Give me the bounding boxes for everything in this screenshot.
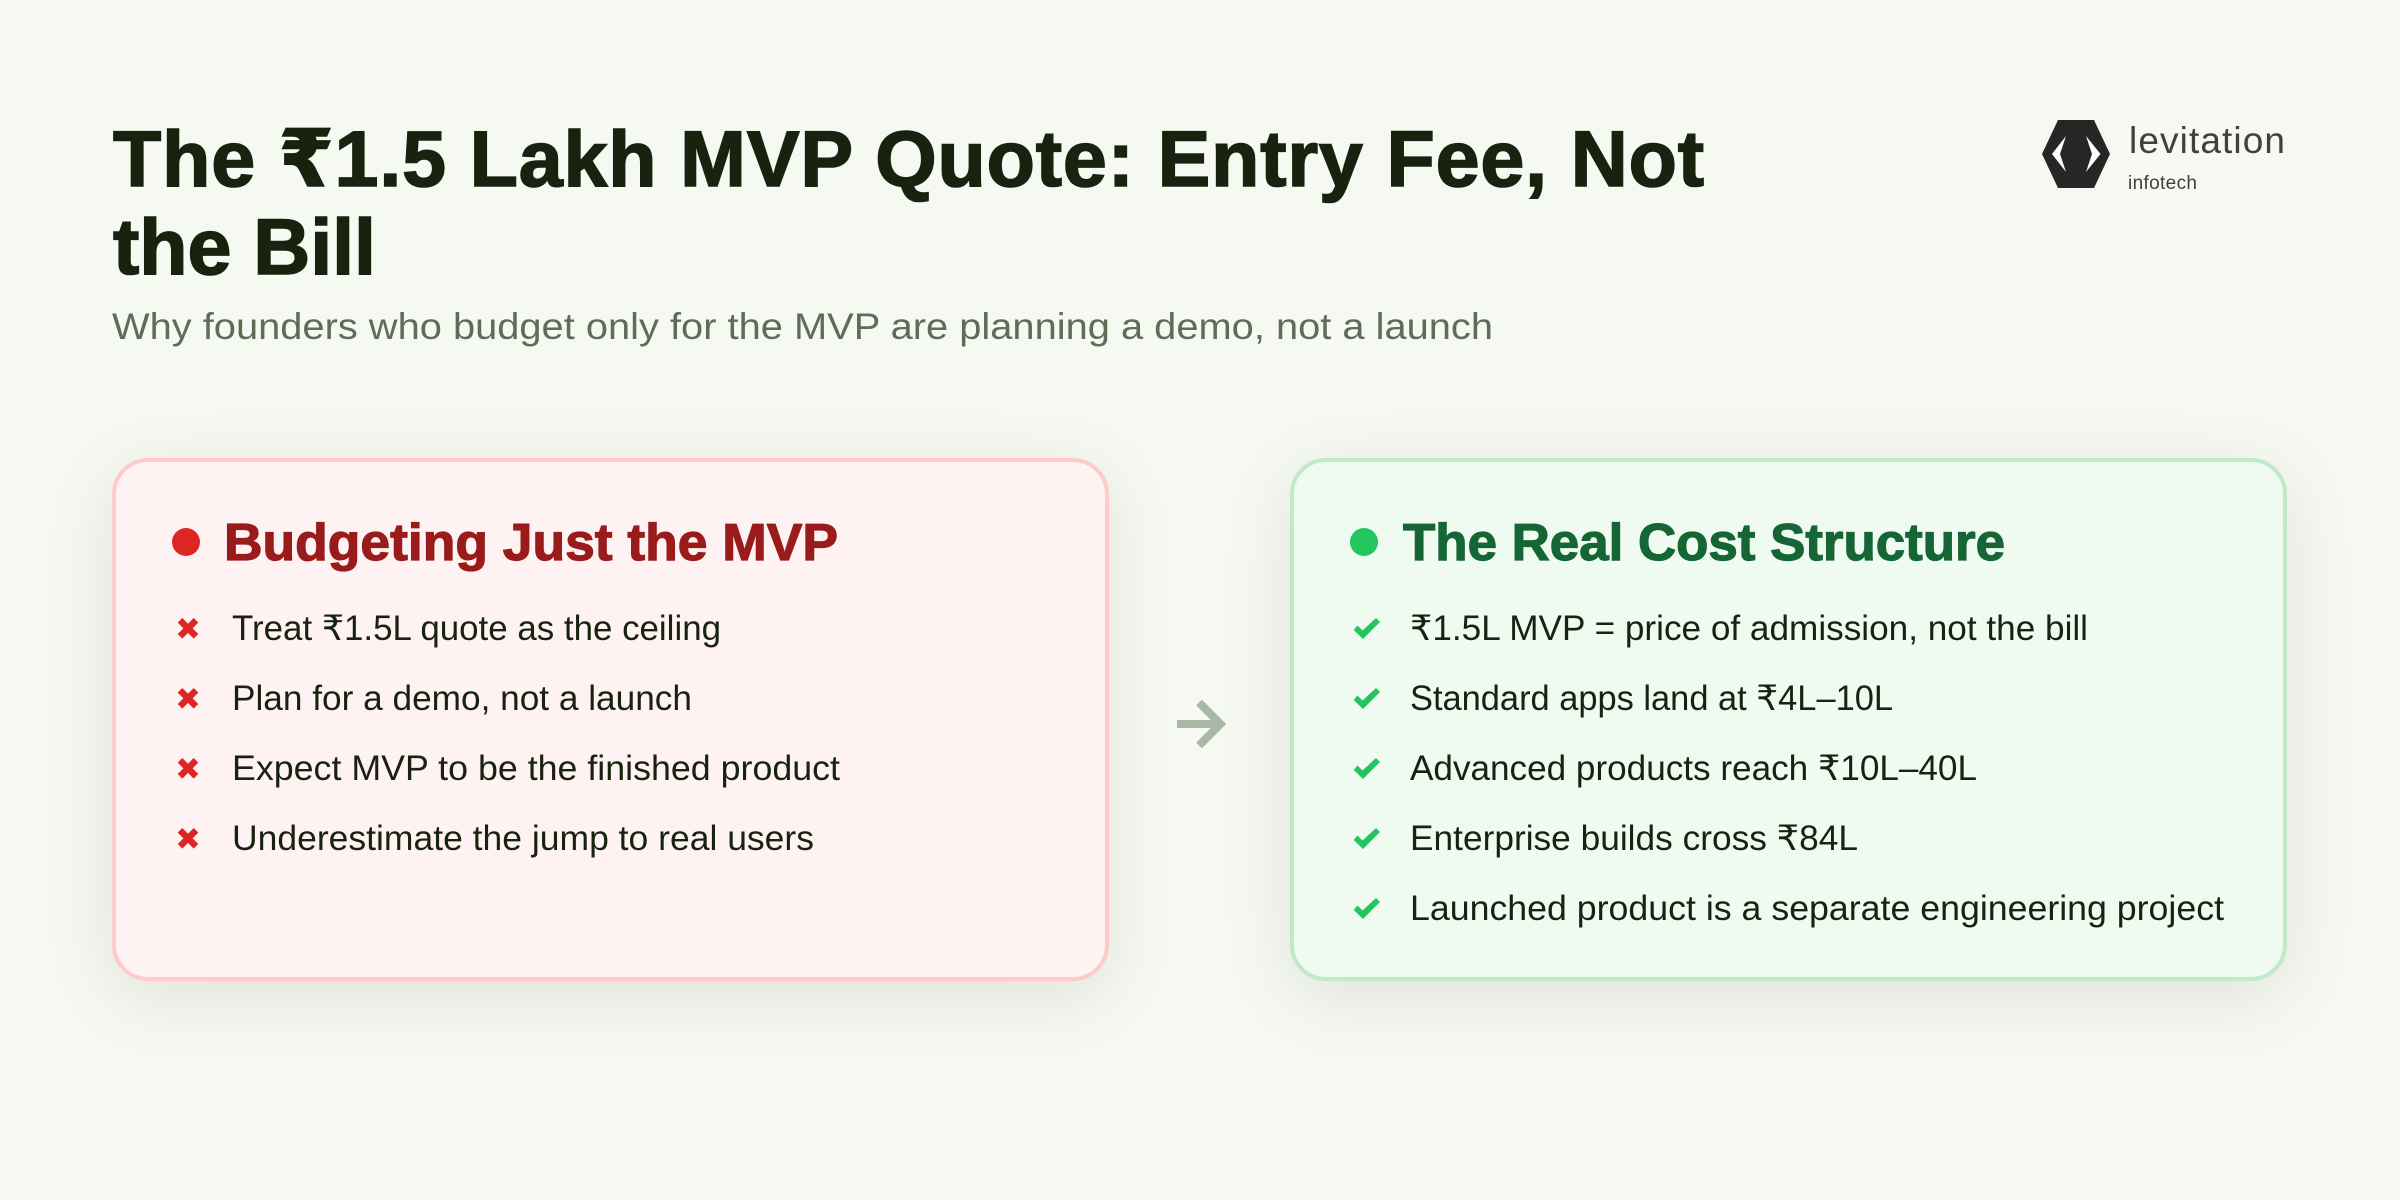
- panel: budgeting just the MVP background: [112, 458, 1109, 981]
- arrow: [1177, 702, 1220, 746]
- list: budgeting mistakes: Plan for a demo, not a launch: [232, 679, 692, 718]
- logo sub-wordmark: infotech: [2128, 173, 2197, 194]
- list: real costs: Launched product is a separate engineering project: [1410, 889, 2224, 928]
- list: budgeting mistakes: [180, 609, 840, 858]
- list: real costs: [1354, 609, 2224, 928]
- list: real costs: Advanced products reach ₹10L–40L: [1410, 749, 1977, 788]
- list: real costs: ₹1.5L MVP = price of admission, not the bill: [1410, 609, 2088, 648]
- right card content: [1350, 514, 2224, 928]
- list: budgeting mistakes: Underestimate the jump to real users: [232, 819, 814, 858]
- panel: real cost structure background: [1290, 458, 2287, 981]
- title: [113, 114, 1704, 291]
- title: the Bill: [113, 202, 376, 291]
- subtitle: Why founders who budget only for the MVP are planning a demo, not a launch: [112, 306, 1493, 347]
- icon: hexagon logo: [2042, 120, 2110, 188]
- list: budgeting mistakes: Treat ₹1.5L quote as the ceiling: [232, 609, 721, 648]
- list: real costs: Enterprise builds cross ₹84L: [1410, 819, 1858, 858]
- left card content: [172, 514, 840, 858]
- logo wordmark: levitation: [2129, 120, 2285, 161]
- title: The ₹1.5 Lakh MVP Quote: Entry Fee, Not: [113, 114, 1704, 203]
- heading: budgeting just the MVP: Budgeting Just the MVP: [224, 514, 838, 572]
- list: real costs: Standard apps land at ₹4L–10L: [1410, 679, 1893, 718]
- logo: levitation infotech: [2042, 120, 2285, 194]
- heading: the real cost structure: The Real Cost Structure: [1403, 514, 2005, 572]
- list: budgeting mistakes: Expect MVP to be the finished product: [232, 749, 840, 788]
